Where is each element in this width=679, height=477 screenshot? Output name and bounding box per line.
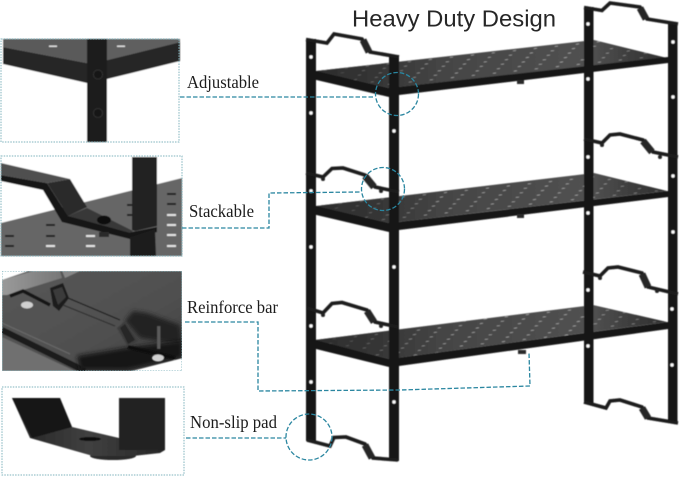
bracket bolts xyxy=(321,143,662,328)
title: Heavy Duty Design xyxy=(352,6,556,32)
callout: Adjustable leader xyxy=(180,72,418,116)
label: Stackable: Stackable xyxy=(189,201,254,221)
mounting holes xyxy=(309,22,675,404)
panel: adjustable detail xyxy=(1,39,180,142)
panel: stackable detail xyxy=(1,156,182,256)
label: Adjustable: Adjustable xyxy=(187,72,259,92)
label: Non-slip pad: Non-slip pad xyxy=(190,412,277,432)
posts xyxy=(306,7,678,461)
callout: Stackable leader xyxy=(182,168,404,228)
brackets xyxy=(306,3,678,460)
top shelf xyxy=(308,40,668,97)
callout: Non-slip pad leader xyxy=(186,414,332,460)
label: Reinforce bar: Reinforce bar xyxy=(187,297,278,317)
panel: reinforce bar detail xyxy=(2,271,183,372)
callout: Reinforce bar leader xyxy=(185,322,530,391)
bottom shelf xyxy=(308,305,668,367)
shelf unit xyxy=(306,3,678,461)
middle shelf xyxy=(308,173,668,232)
panel: non-slip pad detail xyxy=(2,387,184,475)
